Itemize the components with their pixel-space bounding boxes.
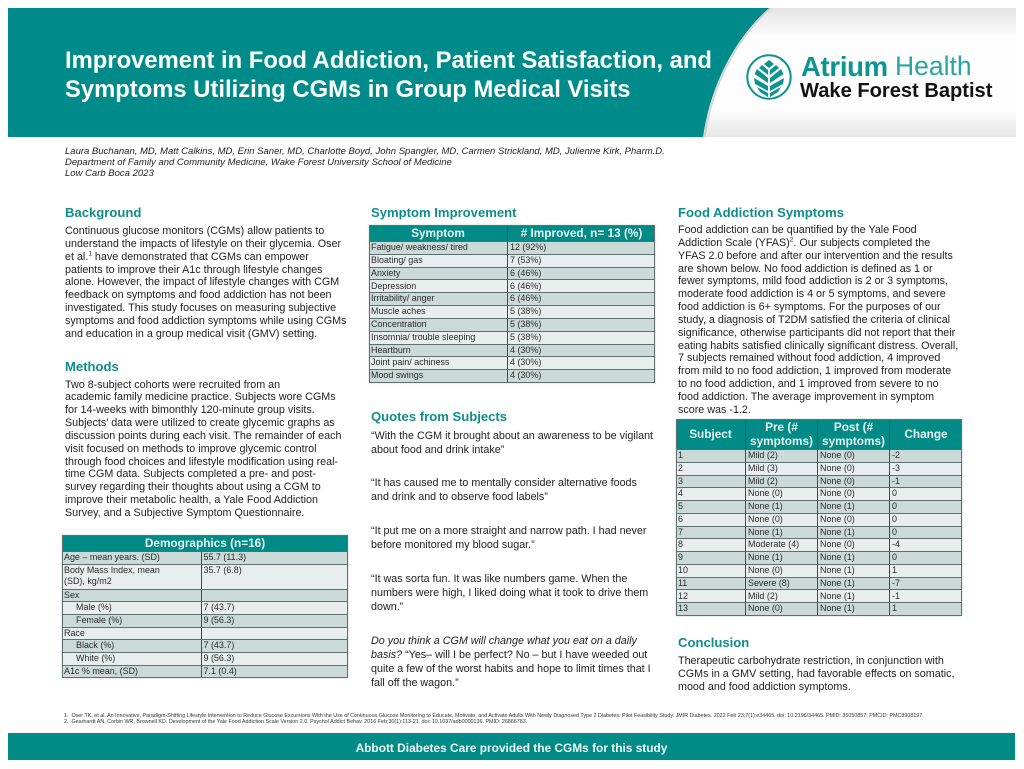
title: Improvement in Food Addiction, Patient Satisfaction, and — [65, 46, 712, 74]
footer banner: funding acknowledgement — [8, 733, 1015, 760]
heading: Conclusion: Conclusion — [678, 635, 749, 650]
text: background: alone. However, the impact of lifestyle changes with CGM — [65, 276, 339, 288]
icon: Atrium Health tree logo — [746, 54, 792, 100]
table: demographics: A1c % mean, (SD) — [64, 666, 138, 676]
text: food addiction: to no food addiction, and 1 improved from severe to no — [678, 378, 939, 390]
text: background: feedback on symptoms and food addiction has not been — [65, 289, 332, 301]
logo wordmark: Atrium: Atrium — [801, 51, 888, 82]
authors and affiliation: Low Carb Boca 2023 — [65, 168, 154, 179]
text: background: investigated. This study focuses on measuring subjective — [65, 302, 336, 314]
table: food addiction by subject: Post (# — [834, 420, 873, 434]
text: methods — [65, 378, 341, 519]
table: food addiction by subject: Pre (# — [765, 420, 798, 434]
table: food addiction by subject: None (0) — [820, 539, 855, 549]
table: symptom improvement: 5 (38%) — [510, 306, 541, 316]
text: methods: for 14-weeks with bimonthly 120-minute group visits. — [65, 404, 315, 416]
quote 2: “It has caused me to mentally consider alternative foods — [371, 477, 637, 489]
table: food addiction by subject: Mild (3) — [748, 463, 778, 473]
text: background: symptoms and food addiction symptoms while using CGMs — [65, 315, 346, 327]
table: food addiction by subject: 4 — [678, 488, 683, 498]
quote 1: about food and drink intake” — [371, 444, 504, 456]
header banner — [8, 8, 1016, 137]
authors and affiliation — [65, 146, 665, 179]
table: demographics: 7 (43.7) — [204, 602, 234, 612]
banner artwork: teal field with curved white logo panel — [8, 8, 1016, 137]
text: food addiction: eating habits satisfied clinically significant distress. Overall, — [678, 340, 958, 352]
authors and affiliation: Department of Family and Community Medicine, Wake Forest University School of Medicine — [65, 157, 452, 168]
heading: Methods: Methods — [65, 358, 119, 374]
table: demographics: 35.7 (6.8) — [204, 565, 242, 575]
table: symptom improvement: 6 (46%) — [510, 293, 541, 303]
quote 5: Do you think a CGM will change what you eat on a daily — [371, 635, 637, 647]
table: demographics: Age – mean years. (SD) — [64, 552, 160, 562]
table: food addiction by subject: None (0) — [748, 565, 783, 575]
quote 3 — [371, 525, 646, 551]
table: demographics: 7.1 (0.4) — [204, 666, 237, 676]
table: symptom improvement: Bloating/ gas — [371, 255, 423, 265]
table: food addiction by subject: None (0) — [820, 514, 855, 524]
table: food addiction by subject: 1 — [892, 565, 897, 575]
table: symptom improvement — [369, 225, 655, 383]
table: demographics — [62, 535, 348, 678]
logo wordmark: Wake Forest Baptist: Wake Forest Baptist — [800, 80, 992, 102]
table: food addiction by subject: Severe (8) — [748, 578, 790, 588]
table: demographics: Demographics (n=16) — [145, 536, 265, 550]
footer banner: funding acknowledgement: Abbott Diabetes Care provided the CGMs for this study — [356, 741, 667, 755]
table: demographics: Female (%) — [76, 615, 122, 625]
text: methods: Subjects’ data were utilized to create glycemic graphs as — [65, 417, 335, 429]
table: symptom improvement: 7 (53%) — [510, 255, 541, 265]
table: food addiction by subject: None (1) — [748, 552, 783, 562]
table: symptom improvement: 6 (46%) — [510, 281, 541, 291]
table: food addiction by subject: 10 — [678, 565, 688, 575]
logo wordmark: Health: Health — [895, 51, 972, 81]
table: food addiction by subject: -7 — [892, 578, 900, 588]
quote 1 — [371, 430, 653, 456]
table: food addiction by subject: 12 — [678, 591, 688, 601]
quote 5: fall off the wagon.” — [371, 677, 459, 689]
table: food addiction by subject — [676, 419, 962, 616]
quote 4: down.” — [371, 601, 403, 613]
table: food addiction by subject: None (0) — [820, 476, 855, 486]
text: food addiction: food addiction is 6+ symptoms. For the purposes of our — [678, 301, 941, 313]
quote 3: before monitored my blood sugar.” — [371, 539, 535, 551]
title: Symptoms Utilizing CGMs in Group Medical Visits — [65, 76, 630, 102]
table: symptom improvement: Symptom — [411, 226, 465, 240]
table: symptom improvement: 12 (92%) — [510, 242, 546, 252]
text: methods: survey regarding their thoughts about using a CGM to — [65, 481, 321, 493]
text: conclusion: mood and food addiction symptoms. — [678, 681, 851, 693]
table: food addiction by subject: 3 — [678, 476, 683, 486]
text: food addiction: YFAS 2.0 before and after our intervention and the results — [678, 250, 953, 262]
quote 1: “With the CGM it brought about an awareness to be vigilant — [371, 430, 653, 442]
quote 4: “It was sorta fun. It was like numbers game. When the — [371, 573, 627, 585]
table: food addiction by subject: -3 — [892, 463, 900, 473]
table: food addiction by subject: 0 — [892, 527, 897, 537]
text: food addiction: moderate food addiction is 4 or 5 symptoms, and severe — [678, 288, 946, 300]
table: food addiction by subject: None (1) — [820, 527, 855, 537]
text: food addiction: are shown below. No food addiction is defined as 1 or — [678, 263, 933, 275]
quote 5: quite a few of the worst habits and hope to limit times that I — [371, 663, 651, 675]
table: food addiction by subject: 5 — [678, 501, 683, 511]
quote 4 — [371, 573, 648, 613]
text: food addiction — [678, 224, 958, 416]
text: background: patients to improve their A1c through lifestyle changes — [65, 264, 323, 276]
table: food addiction by subject: Moderate (4) — [748, 539, 799, 549]
table: demographics: (SD), kg/m2 — [64, 576, 112, 586]
table: food addiction by subject: Mild (2) — [748, 591, 778, 601]
references: 2. Gearhardt AN, Corbin WR, Brownell KD. Development of the Yale Food Addiction Scale Version 2.0. Psychol Addict Behav. 2016 Feb;30(1):113-21. doi: 10.1037/adb0000136. PMID: 26866783. — [64, 718, 527, 724]
table: food addiction by subject: symptoms) — [750, 434, 813, 448]
quote 2: and drink and to observe food labels” — [371, 491, 548, 503]
text: methods: through food choices and lifestyle modification using real- — [65, 456, 338, 468]
table: symptom improvement: 6 (46%) — [510, 268, 541, 278]
table: symptom improvement: Concentration — [371, 319, 427, 329]
table: food addiction by subject: -2 — [892, 450, 900, 460]
table: symptom improvement: Joint pain/ achiness — [371, 357, 450, 367]
quote 2 — [371, 477, 637, 503]
text: conclusion — [678, 655, 954, 693]
text: conclusion: Therapeutic carbohydrate restriction, in conjunction with — [678, 655, 944, 667]
table: food addiction by subject: None (1) — [748, 527, 783, 537]
table: food addiction by subject: 0 — [892, 552, 897, 562]
heading: Quotes from Subjects: Quotes from Subjects — [371, 409, 507, 424]
table: food addiction by subject: 6 — [678, 514, 683, 524]
table: symptom improvement: Heartburn — [371, 345, 411, 355]
table: demographics: Body Mass Index, mean — [64, 565, 160, 575]
table: symptom improvement: Irritability/ anger — [371, 293, 435, 303]
text: conclusion: CGMs in a GMV setting, had favorable effects on somatic, — [678, 668, 954, 680]
heading: Symptom Improvement: Symptom Improvement — [371, 205, 517, 220]
table: food addiction by subject: None (0) — [820, 463, 855, 473]
text: methods: visit focused on methods to improve glycemic control — [65, 443, 317, 455]
table: symptom improvement: 5 (38%) — [510, 332, 541, 342]
text: food addiction: study, a diagnosis of T2DM satisfied the criteria of clinical — [678, 314, 950, 326]
text: background: understand the impacts of lifestyle on their glycemia. Oser — [65, 238, 341, 250]
title — [65, 46, 712, 102]
table: food addiction by subject: None (0) — [820, 450, 855, 460]
table: demographics: 9 (56.3) — [204, 615, 234, 625]
table: demographics: Sex — [64, 590, 79, 600]
table: food addiction by subject: 13 — [678, 603, 688, 613]
table: symptom improvement: 5 (38%) — [510, 319, 541, 329]
table: food addiction by subject: None (0) — [820, 488, 855, 498]
table: food addiction by subject: -4 — [892, 539, 900, 549]
table: symptom improvement: 4 (30%) — [510, 370, 541, 380]
text: methods: improve their metabolic health, a Yale Food Addiction — [65, 494, 318, 506]
quote 4: numbers were high, I liked doing what it took to drive them — [371, 587, 648, 599]
heading: Background: Background — [65, 205, 141, 220]
table: food addiction by subject: None (0) — [748, 514, 783, 524]
table: demographics: White (%) — [76, 653, 115, 663]
text: food addiction: fewer symptoms, mild food addiction is 2 or 3 symptoms, — [678, 275, 948, 287]
table: food addiction by subject: 1 — [678, 450, 683, 460]
table: food addiction by subject: None (1) — [820, 578, 855, 588]
text: methods: discussion points during each visit. The remainder of each — [65, 430, 341, 442]
table: food addiction by subject: None (1) — [820, 501, 855, 511]
table: food addiction by subject: 1 — [892, 603, 897, 613]
table: demographics: Male (%) — [76, 602, 112, 612]
text: food addiction: score was -1.2. — [678, 404, 751, 416]
table: food addiction by subject: 7 — [678, 527, 683, 537]
references — [64, 712, 924, 724]
authors and affiliation: Laura Buchanan, MD, Matt Calkins, MD, Erin Saner, MD, Charlotte Boyd, John Spangler, MD, Carmen Strickland, MD, Julienne Kirk, Pharm.D. — [65, 146, 665, 157]
text: food addiction: Addiction Scale (YFAS)2. Our subjects completed the — [678, 236, 930, 249]
table: food addiction by subject: 9 — [678, 552, 683, 562]
text: food addiction: significance, otherwise participants did not report that their — [678, 327, 955, 339]
table: demographics: Black (%) — [76, 640, 114, 650]
text: food addiction: food addiction. The average improvement in symptom — [678, 391, 934, 403]
text: background: Continuous glucose monitors (CGMs) allow patients to — [65, 225, 324, 237]
table: demographics: 9 (56.3) — [204, 653, 234, 663]
table: symptom improvement: 4 (30%) — [510, 345, 541, 355]
table: demographics: Race — [64, 628, 85, 638]
table: food addiction by subject: None (1) — [820, 565, 855, 575]
table: demographics: 7 (43.7) — [204, 640, 234, 650]
table: symptom improvement: # Improved, n= 13 (%) — [521, 226, 642, 240]
text: food addiction: Food addiction can be quantified by the Yale Food — [678, 224, 917, 236]
text: background — [65, 225, 346, 340]
table: food addiction by subject: None (0) — [748, 488, 783, 498]
table: symptom improvement: Depression — [371, 281, 416, 291]
table: food addiction by subject: None (1) — [820, 552, 855, 562]
table: symptom improvement: Fatigue/ weakness/ tired — [371, 242, 468, 252]
table: food addiction by subject: 0 — [892, 501, 897, 511]
heading: Food Addiction Symptoms: Food Addiction Symptoms — [678, 204, 844, 220]
table: symptom improvement: Anxiety — [371, 268, 400, 278]
quote 3: “It put me on a more straight and narrow path. I had never — [371, 525, 646, 537]
table: food addiction by subject: symptoms) — [822, 434, 885, 448]
text: background: and education in a group medical visit (GMV) setting. — [65, 328, 317, 340]
table: food addiction by subject: None (0) — [748, 603, 783, 613]
quote 5 — [371, 635, 651, 689]
table: food addiction by subject: -1 — [892, 591, 900, 601]
table: food addiction by subject: 0 — [892, 514, 897, 524]
table: food addiction by subject: Subject — [689, 427, 732, 441]
quote 5: basis? “Yes– will I be perfect? No – but I have weeded out — [371, 649, 647, 661]
text: methods: time CGM data. Subjects completed a pre- and post- — [65, 468, 316, 480]
references: 1. Oser TK, et al. An Innovative, Paradigm-Shifting Lifestyle Intervention to Reduce Glucose Excursions With the Use of Continuous Glucose Monitoring to Educate, Motivate, and Activate Adults With Newly Diagnosed Type 2 Diabetes: Pilot Feasibility Study. JMIR Diabetes. 2022 Feb 23;7(1):e34465. doi: 10.2196/34465. PMID: 35050857; PMCID: PMC8908197. — [64, 712, 924, 718]
text: methods: academic family medicine practice. Subjects wore CGMs — [65, 391, 336, 403]
table: food addiction by subject: Mild (2) — [748, 450, 778, 460]
text: background: et al.1 have demonstrated that CGMs can empower — [65, 250, 309, 263]
text: methods: Two 8-subject cohorts were recruited from an — [65, 378, 280, 390]
table: food addiction by subject: Mild (2) — [748, 476, 778, 486]
table: food addiction by subject: 0 — [892, 488, 897, 498]
table: food addiction by subject: 2 — [678, 463, 683, 473]
table: food addiction by subject: Change — [904, 427, 948, 441]
table: food addiction by subject: 8 — [678, 539, 683, 549]
table: symptom improvement: Muscle aches — [371, 306, 426, 316]
table: demographics: 55.7 (11.3) — [204, 552, 246, 562]
text: food addiction: from mild to no food addiction, 1 improved from moderate — [678, 365, 951, 377]
table: food addiction by subject: 11 — [678, 578, 687, 588]
table: symptom improvement: 4 (30%) — [510, 357, 541, 367]
table: food addiction by subject: None (1) — [748, 501, 783, 511]
table: food addiction by subject: None (1) — [820, 591, 855, 601]
table: food addiction by subject: None (1) — [820, 603, 855, 613]
text: food addiction: 7 subjects remained without food addiction, 4 improved — [678, 352, 940, 364]
table: symptom improvement: Insomnia/ trouble sleeping — [371, 332, 475, 342]
table: symptom improvement: Mood swings — [371, 370, 423, 380]
table: food addiction by subject: -1 — [892, 476, 900, 486]
text: methods: Survey, and a Subjective Symptom Questionnaire. — [65, 507, 304, 519]
